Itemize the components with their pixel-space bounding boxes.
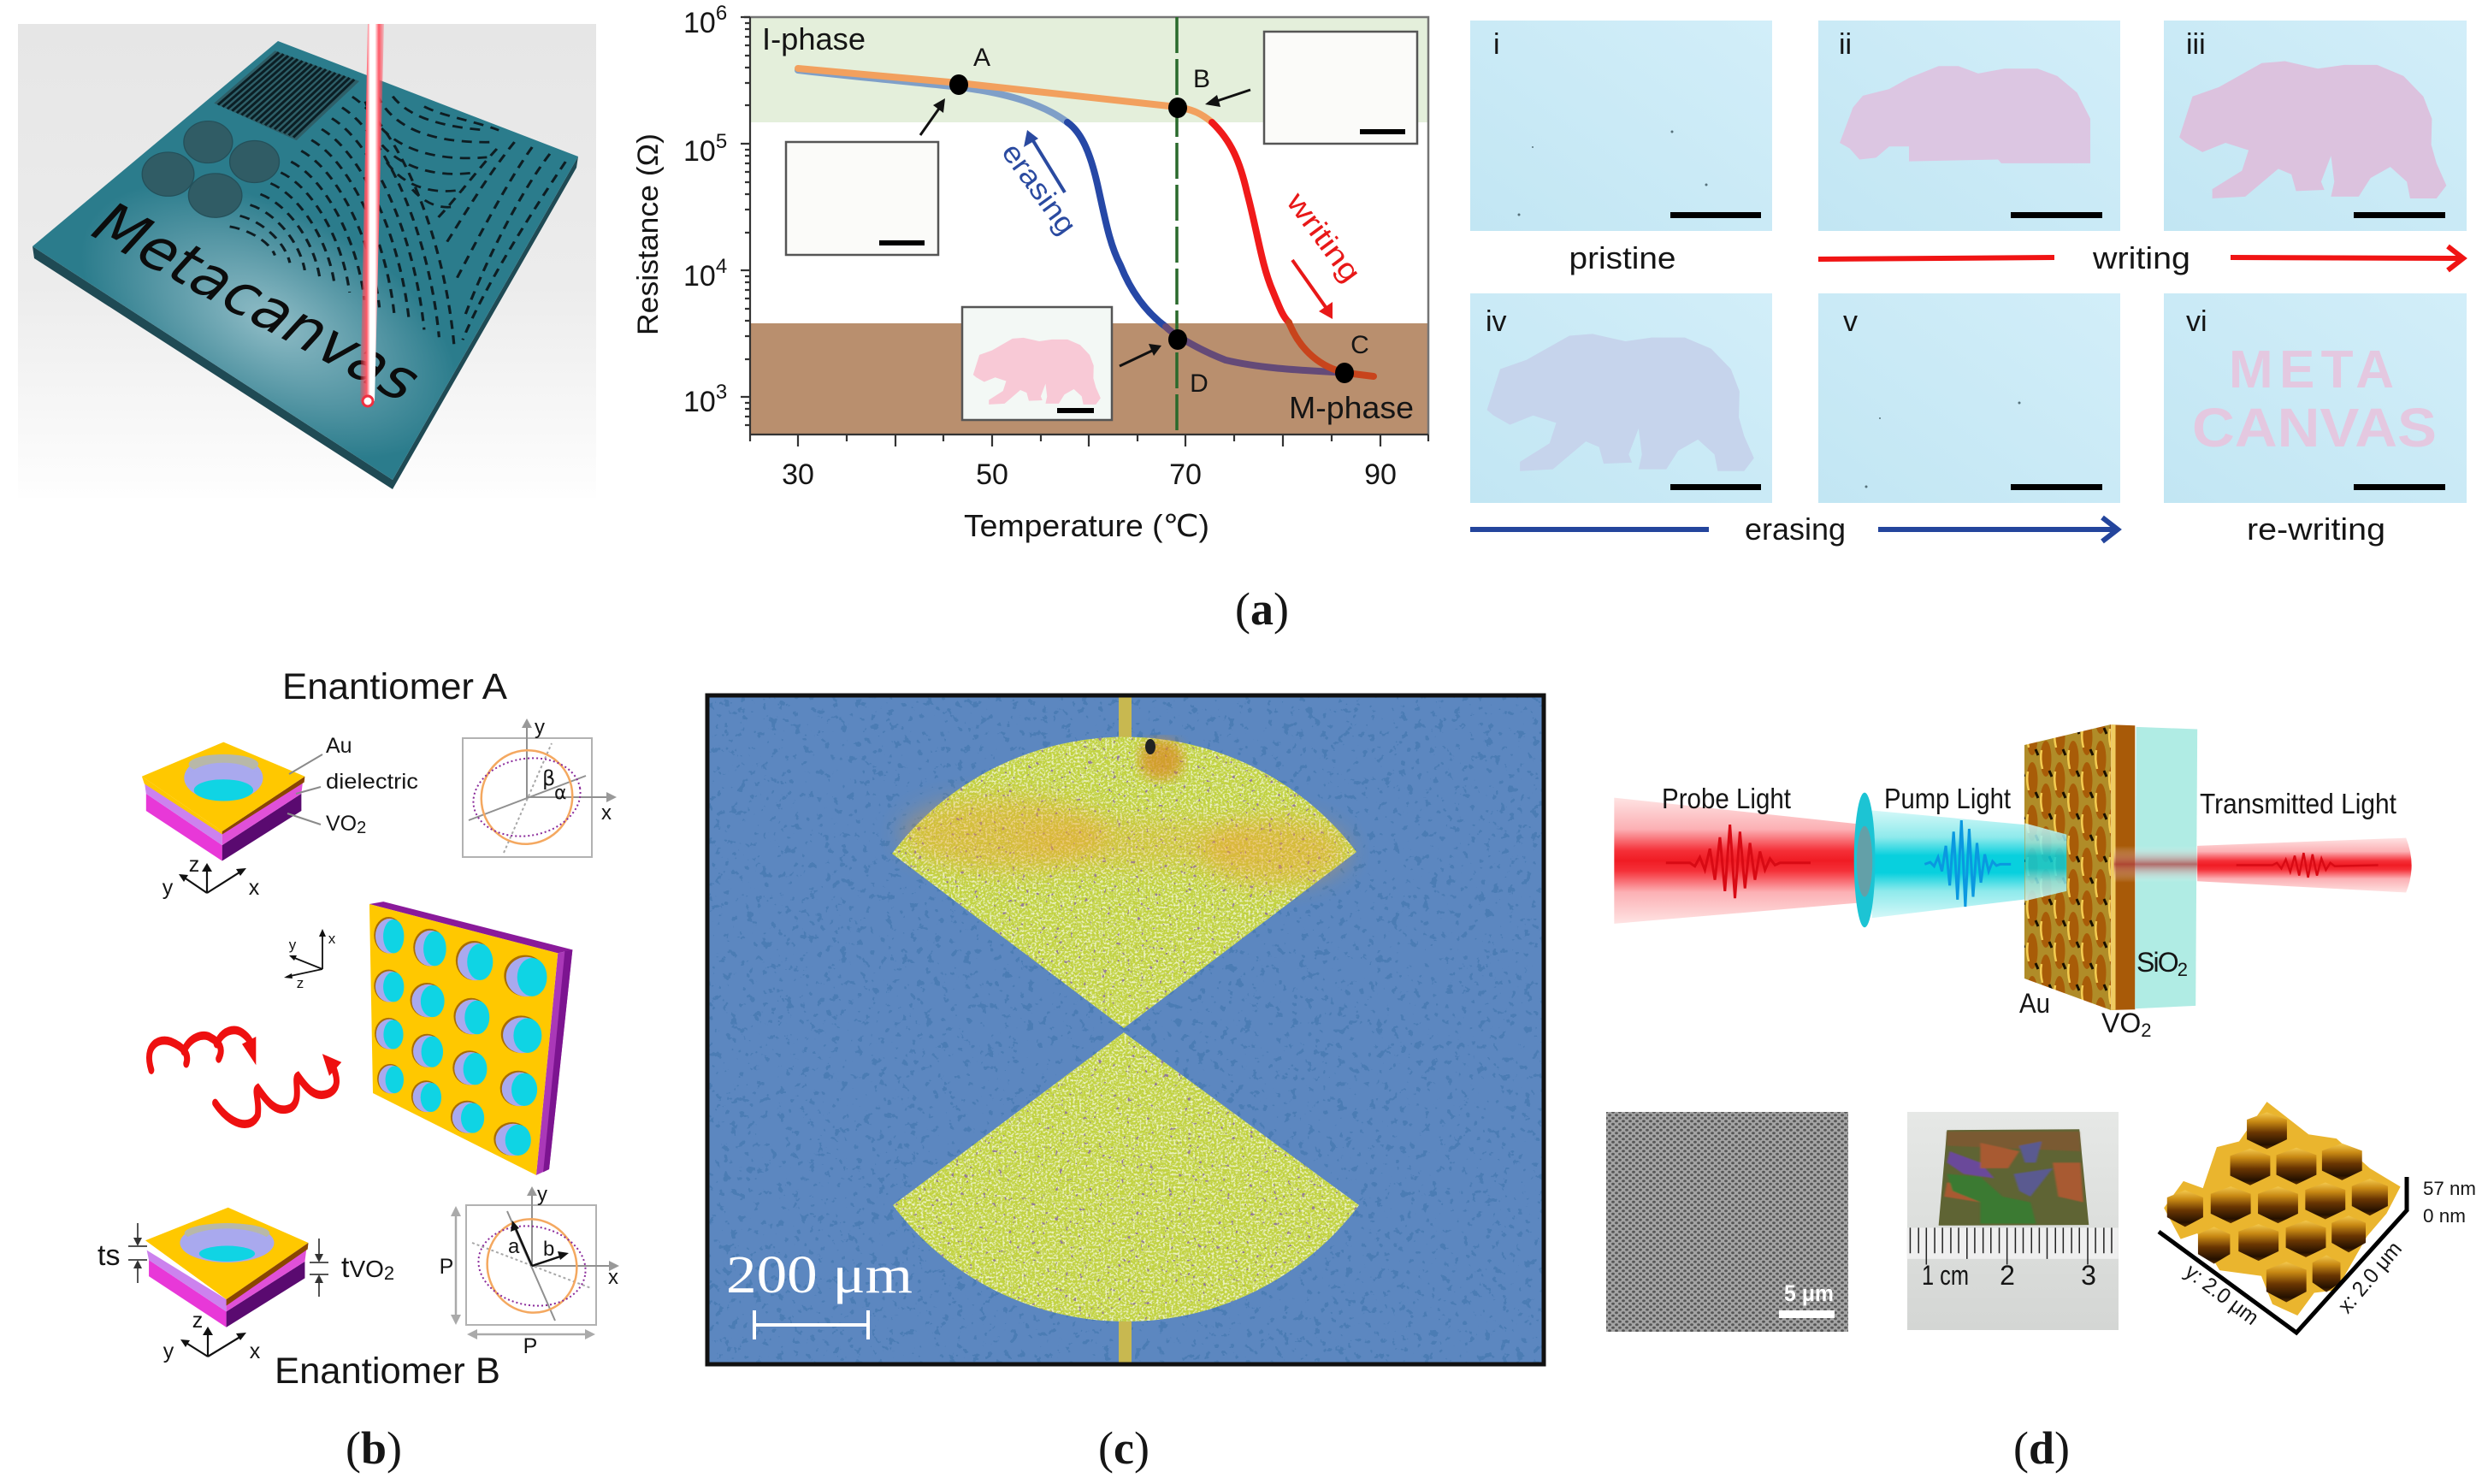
y tick labels: 10 <box>683 386 716 418</box>
substrate <box>707 695 1544 1364</box>
micrograph i: i <box>1493 28 1500 61</box>
scale bar <box>754 1310 868 1339</box>
thickness marks <box>98 1223 394 1297</box>
VO2 label: 2 <box>2141 1020 2151 1041</box>
x tick labels: 50 <box>976 458 1008 491</box>
pump wave packet <box>1924 820 2011 907</box>
micrograph v <box>1818 293 2120 503</box>
state points <box>949 74 1354 383</box>
erasing arrow <box>1470 517 2118 541</box>
polar diagram B: b <box>543 1238 554 1261</box>
layer labels: Au <box>326 734 352 758</box>
plate top surface <box>33 41 578 480</box>
polar diagram B: P <box>440 1255 453 1279</box>
axes B: x <box>250 1339 261 1363</box>
SiO2 label: SiO <box>2136 947 2179 978</box>
mid axes <box>284 929 336 991</box>
ruler labels: 2 <box>2000 1260 2015 1291</box>
I-phase label: I-phase <box>762 21 866 56</box>
beam through sample <box>2114 846 2197 883</box>
axes B: z <box>192 1309 203 1333</box>
device background <box>18 24 596 498</box>
I-phase band <box>750 17 1428 122</box>
micrograph vi <box>2164 293 2467 503</box>
bottom feed line <box>1119 1321 1132 1364</box>
caption a: (a) <box>1235 583 1289 635</box>
re-writing label: re-writing <box>2247 511 2385 547</box>
state labels: B <box>1193 65 1210 93</box>
Transmitted Light label: Transmitted Light <box>2200 788 2396 819</box>
y axis title: Resistance (Ω) <box>632 133 665 335</box>
image border <box>707 695 1544 1364</box>
SEM scale bar <box>1779 1310 1835 1318</box>
AFM surface and pits <box>2164 1102 2401 1315</box>
upper bowtie sector <box>892 737 1356 1028</box>
writing arrow <box>1818 246 2463 270</box>
AFM height labels: 0 nm <box>2423 1205 2466 1227</box>
mid axes: x <box>328 931 336 947</box>
Au perforated layer <box>2024 724 2111 1010</box>
perforated gold array <box>369 902 572 1175</box>
axes A: y <box>163 876 174 900</box>
polar diagram B: x <box>608 1266 618 1289</box>
polar diagram B <box>440 1183 619 1358</box>
Enantiomer B title: Enantiomer B <box>275 1351 500 1392</box>
micrograph ii: ii <box>1839 28 1852 61</box>
orange tint on upper sector <box>902 739 1347 884</box>
y tick labels: 10 <box>683 135 716 168</box>
y tick labels: 10 <box>683 7 716 39</box>
mid axes: z <box>297 975 304 991</box>
polar diagram B: P <box>523 1334 537 1358</box>
micrograph i <box>1470 21 1772 231</box>
layer labels: dielectric <box>326 770 418 794</box>
panel d: SEM image <box>1606 1112 1848 1332</box>
circularly polarized light spirals <box>149 1030 341 1124</box>
axes B <box>163 1309 261 1363</box>
micrograph ii <box>1818 21 2120 231</box>
polar diagram A <box>463 716 617 857</box>
plate side faces <box>33 157 578 489</box>
state labels: D <box>1190 370 1209 398</box>
laser beam <box>360 24 384 406</box>
inset: bear <box>962 307 1112 420</box>
polar diagram A: β <box>542 766 555 790</box>
thickness marks: tVO <box>341 1251 384 1284</box>
erasing direction label and arrow: erasing <box>996 137 1083 240</box>
pristine label: pristine <box>1569 240 1676 275</box>
writing curve <box>798 68 1374 376</box>
writing label: writing <box>2092 240 2190 275</box>
ruler <box>1907 1227 2119 1264</box>
writing direction label and arrow <box>1279 186 1367 319</box>
thickness marks: ts <box>98 1239 120 1272</box>
panel b: chiral metasurface <box>98 666 619 1392</box>
ruler labels: 1 cm <box>1922 1260 1969 1291</box>
panel d: pump probe schematic <box>1614 724 2412 1041</box>
y tick labels: 4 <box>716 255 727 278</box>
grating patch <box>214 50 359 140</box>
axes and ticks <box>741 17 1428 446</box>
panel d: sample photograph with ruler <box>1907 1112 2119 1330</box>
top feed line <box>1119 695 1132 740</box>
polar diagram B: a <box>508 1235 520 1258</box>
pump lens and beam <box>1854 793 2070 927</box>
unit cell B <box>145 1208 309 1327</box>
Probe Light label: Probe Light <box>1662 783 1791 814</box>
M-phase label: M-phase <box>1289 390 1414 425</box>
micrograph iii <box>2164 21 2467 231</box>
sample <box>1939 1129 2089 1226</box>
axes A: z <box>189 853 199 877</box>
micrograph vi: CANVAS <box>2192 397 2437 458</box>
Metacanvas engraved text: Metacanvas <box>75 192 437 413</box>
AFM x extent label: x: 2.0 μm <box>2333 1237 2407 1318</box>
layer labels <box>326 734 418 837</box>
erasing label: erasing <box>1745 511 1846 547</box>
VO2 layer <box>2111 724 2135 1010</box>
micrograph vi: vi <box>2186 305 2207 338</box>
SEM scale label: 5 μm <box>1784 1280 1834 1306</box>
writing direction label and arrow: writing <box>1279 186 1367 288</box>
polar diagram B: y <box>537 1183 547 1206</box>
axes A: x <box>249 876 260 900</box>
panel a: resistance versus temperature chart <box>632 2 1428 543</box>
metasurface dash field <box>230 95 565 345</box>
lower bowtie sector <box>893 1032 1359 1321</box>
micrograph vi: META <box>2229 340 2394 399</box>
y tick labels: 6 <box>716 2 727 25</box>
polar diagram A: α <box>554 783 567 804</box>
panel a: optical micrographs i to vi <box>1470 21 2467 547</box>
y tick labels: 10 <box>683 260 716 293</box>
layer labels: VO <box>326 812 357 836</box>
erasing curve <box>798 70 1346 373</box>
scale text: 200 μm <box>726 1246 913 1304</box>
micrograph v: v <box>1843 305 1858 338</box>
state labels: A <box>973 44 990 72</box>
AFM height labels <box>2423 1178 2476 1227</box>
y tick labels <box>683 2 727 418</box>
thickness marks: 2 <box>384 1262 394 1284</box>
plot frame <box>744 17 1428 435</box>
mid axes: y <box>289 937 297 953</box>
transmitted wave packet <box>2237 853 2379 878</box>
y tick labels: 3 <box>716 381 727 404</box>
ruler labels: 3 <box>2081 1260 2096 1291</box>
caption d: (d) <box>2013 1422 2070 1474</box>
panel d: AFM topography <box>2159 1102 2476 1333</box>
state labels: C <box>1350 331 1369 359</box>
M-phase band <box>750 323 1428 435</box>
probe wave packet <box>1666 825 1811 898</box>
Enantiomer A title: Enantiomer A <box>282 666 507 707</box>
Au label: Au <box>2019 988 2050 1019</box>
unit cell A <box>142 742 304 860</box>
x tick labels <box>782 458 1397 491</box>
x tick labels: 30 <box>782 458 814 491</box>
state labels <box>973 44 1369 398</box>
x axis title: Temperature (℃) <box>964 508 1209 543</box>
x tick labels: 90 <box>1364 458 1397 491</box>
layer leader lines <box>287 754 322 825</box>
ruler labels <box>1922 1260 2096 1291</box>
SiO2 label: 2 <box>2178 959 2188 980</box>
y tick labels: 5 <box>716 130 727 153</box>
inset: left blank <box>786 142 938 255</box>
micrograph iv <box>1470 293 1772 503</box>
Pump Light label: Pump Light <box>1884 783 2011 814</box>
caption b: (b) <box>346 1422 402 1474</box>
panel a: metacanvas device illustration <box>18 24 596 498</box>
SiO2 layer <box>2135 727 2197 1008</box>
four lens discs <box>142 121 279 217</box>
pump beam over Au <box>2024 823 2066 901</box>
layer labels: 2 <box>357 819 366 837</box>
micrograph iv: iv <box>1486 305 1507 338</box>
axes A <box>163 853 260 900</box>
AFM y extent label: y: 2.0 μm <box>2180 1259 2263 1330</box>
panel c: bowtie antenna micrograph <box>707 695 1544 1364</box>
probe beam <box>1614 798 1864 924</box>
dashed 70 degree line <box>1175 17 1179 435</box>
transmitted beam <box>2197 838 2412 892</box>
AFM axes <box>2159 1177 2408 1333</box>
inset arrows <box>920 90 1250 366</box>
polar diagram A: x <box>601 801 612 825</box>
inset: right blank <box>1264 32 1417 144</box>
micrograph iii: iii <box>2186 28 2206 61</box>
VO2 label: VO <box>2101 1008 2141 1038</box>
AFM height labels: 57 nm <box>2423 1178 2476 1199</box>
caption c: (c) <box>1098 1422 1149 1474</box>
axes B: y <box>163 1339 174 1363</box>
x tick labels: 70 <box>1169 458 1202 491</box>
polar diagram A: y <box>535 716 545 739</box>
